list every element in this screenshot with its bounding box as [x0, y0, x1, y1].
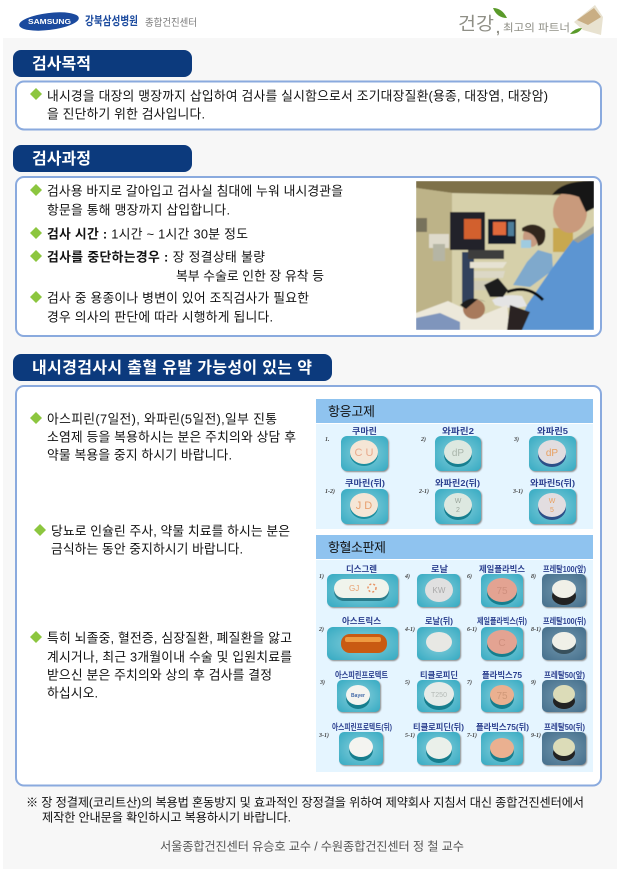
chart: antiplatelet pills — [316, 535, 593, 772]
pill: 와파린2: dP — [452, 448, 464, 459]
icon: bullet — [34, 524, 46, 536]
pill labels: 3) — [319, 679, 325, 686]
heading: 출혈 유발 약 — [13, 354, 332, 381]
footnote: 제작한 안내문을 확인하시고 복용하시기 바랍니다. — [42, 810, 291, 824]
pill labels: 프레탈100(앞) — [543, 564, 586, 574]
panel: procedure — [16, 177, 601, 336]
pill: 와파린5 뒤: W — [549, 498, 556, 505]
text: stop conditions — [47, 250, 324, 284]
pill labels: 티클로피딘(뒤) — [413, 722, 464, 732]
credits: 서울종합건진센터 유승호 교수 / 수원종합건진센터 정 철 교수 — [160, 840, 464, 854]
pill labels: 아스트릭스 — [342, 616, 381, 626]
text: procedure step: 검사용 바지로 갈아입고 검사실 침대에 누워 내시경관을 — [47, 184, 343, 198]
pill labels: 5-1) — [405, 732, 415, 739]
slogan: 최고의 파트너 — [503, 22, 570, 34]
icon: envelope — [570, 5, 603, 35]
pill labels: 제일플라빅스(뒤) — [477, 616, 527, 626]
heading: 검사목적 — [13, 50, 192, 77]
text: diabetes advice: 당뇨로 인슐린 주사, 약물 치료를 하시는 분은 — [51, 524, 290, 538]
text: diabetes advice — [51, 524, 290, 556]
pill labels: 4) — [404, 573, 410, 580]
pill: 와파린2 뒤: W — [455, 498, 462, 505]
pill labels: 프레탈100(뒤) — [543, 616, 586, 626]
pill labels: 와파린5 — [537, 426, 568, 436]
text: stroke advice: 계시거나, 최근 3개월이내 수술 및 입원치료를 — [47, 650, 292, 664]
heading: 검사목적: 검사목적 — [32, 55, 91, 73]
pill: 쿠마린 뒤 — [341, 489, 388, 524]
pill labels: 1) — [319, 573, 324, 580]
text: stop conditions: 복부 수술로 인한 장 유착 등 — [176, 268, 324, 284]
bed and patient — [416, 301, 510, 330]
pill: 쿠마린 — [341, 436, 388, 471]
header: hospital logo — [18, 9, 197, 34]
pill labels: 프레탈50(뒤) — [544, 722, 585, 732]
text: biopsy: 검사 중 용종이나 병변이 있어 조직검사가 필요한 — [47, 290, 309, 306]
panel: purpose — [16, 82, 601, 130]
pill labels: 플라빅스75(뒤) — [476, 722, 529, 732]
text: purpose: 내시경을 대장의 맹장까지 삽입하여 검사를 실시함으로서 조기대장질환(용종, 대장염, 대장암) — [47, 88, 548, 104]
doctor — [520, 232, 594, 330]
pill labels: 9-1) — [531, 732, 541, 739]
text: procedure step — [47, 184, 343, 218]
pill labels: 5) — [405, 679, 410, 686]
header: slogan with envelope — [458, 5, 603, 36]
pill labels: 1. — [325, 437, 330, 443]
pill: 와파린2 뒤: 2 — [456, 507, 460, 514]
pill labels: 3) — [513, 436, 519, 443]
row 4 pills — [339, 732, 586, 765]
cart — [462, 252, 474, 307]
pill labels: 티클로피딘 — [420, 670, 458, 680]
center name: 종합건진센터 — [145, 17, 197, 29]
text: stroke advice: 하십시오. — [47, 686, 98, 700]
hospital name: 강북삼성병원 — [85, 14, 138, 28]
pill labels: 쿠마린(뒤) — [345, 478, 385, 488]
text: stroke advice: 받으신 분은 주치의와 상의 후 검사를 결정 — [47, 668, 272, 682]
pill labels: 쿠마린 — [352, 426, 377, 436]
text: aspirin advice: 아스피린(7일전), 와파린(5일전),일부 진통 — [47, 412, 277, 426]
icon: Samsung logo: SAMSUNG — [28, 17, 71, 26]
pill labels: 6) — [467, 573, 472, 580]
pill labels: 8-1) — [531, 626, 541, 633]
heading: antiplatelet: 항혈소판제 — [328, 540, 386, 555]
heading: 검사과정 — [13, 145, 192, 172]
pill labels: 제일플라빅스 — [479, 564, 525, 574]
pill labels: 2) — [420, 436, 426, 443]
pill: 와파린2 — [435, 436, 481, 471]
icon: bullet — [30, 291, 42, 303]
chart: anticoagulant pills — [316, 399, 593, 529]
pill: 와파린5 뒤 — [529, 489, 576, 524]
pill: 와파린2 뒤 — [435, 489, 481, 524]
pill labels: 아스피린프로텍트 — [335, 670, 388, 680]
icon: bullet — [30, 412, 42, 424]
row 1 pills — [327, 574, 586, 607]
pill labels — [325, 426, 575, 495]
icon: bullet — [30, 184, 42, 196]
heading: 출혈 유발 약: 내시경검사시 출혈 유발 가능성이 있는 약 — [32, 358, 312, 377]
text: aspirin advice: 약물 복용을 중지 하시기 바랍니다. — [47, 448, 232, 462]
text: biopsy: 경우 의사의 판단에 따라 시행하게 됩니다. — [47, 310, 273, 324]
footnote — [26, 794, 584, 824]
text: purpose: 을 진단하기 위한 검사입니다. — [47, 106, 205, 122]
text: stroke advice: 특히 뇌졸중, 혈전증, 심장질환, 폐질환을 앓고 — [47, 630, 292, 646]
row 2 pills: C — [498, 638, 506, 649]
pill labels: 플라빅스75 — [482, 670, 522, 680]
pill labels: 프레탈50(앞) — [544, 670, 585, 680]
pill labels — [318, 564, 586, 739]
cabinet — [553, 228, 573, 252]
pill labels: 7-1) — [467, 732, 477, 739]
row 2 pills — [327, 627, 586, 660]
row 1 pills: GJ — [349, 584, 359, 593]
pill labels: 로날 — [431, 564, 448, 574]
pill labels: 7) — [467, 679, 472, 686]
pill labels: 4-1) — [404, 626, 415, 633]
heading: 검사과정: 검사과정 — [32, 150, 91, 168]
pill labels: 디스그렌 — [346, 564, 377, 574]
text: diabetes advice: 금식하는 동안 중지하시기 바랍니다. — [51, 542, 243, 556]
pill labels: 아스피린프로텍트(뒤) — [332, 722, 392, 732]
text: stroke advice — [47, 630, 292, 700]
heading: anticoagulant: 항응고제 — [328, 404, 375, 419]
pill labels: 와파린2(뒤) — [435, 478, 480, 488]
pill labels: 3-1) — [512, 488, 523, 495]
text: biopsy — [47, 290, 309, 324]
pill: 와파린5: dP — [546, 448, 558, 459]
text: procedure step: 항문을 통해 맹장까지 삽입합니다. — [47, 202, 230, 218]
hand and scope — [492, 295, 527, 308]
slogan: 건강 — [458, 14, 494, 34]
text: duration: 검사 시간 : 1시간 ~ 1시간 30분 정도 — [47, 226, 248, 242]
row 1 pills: KW — [433, 586, 446, 595]
pill labels: 9) — [531, 679, 536, 686]
row 1 pills: 75 — [496, 586, 508, 597]
pill labels: 3-1) — [318, 732, 329, 739]
row 3 pills: Bayer — [351, 693, 365, 699]
icon: Samsung logo — [18, 9, 80, 34]
wall equipment — [416, 218, 427, 232]
row 3 pills — [337, 680, 586, 712]
pill labels: 8) — [531, 573, 536, 580]
text: purpose — [47, 88, 548, 122]
pill: 쿠마린 뒤: J D — [356, 500, 372, 512]
pill labels: 2-1) — [418, 488, 429, 495]
footnote: ※ 장 정결제(코리트산)의 복용법 혼동방지 및 효과적인 장정결을 위하여 제약회사 지침서 대신 종합건진센터에서 — [26, 794, 584, 810]
pill labels: 와파린5(뒤) — [530, 478, 575, 488]
pill labels: 1-2) — [325, 488, 335, 495]
photo: endoscopy room — [416, 181, 594, 330]
pill labels: 6-1) — [467, 626, 477, 633]
monitors — [450, 212, 485, 250]
pill: 쿠마린: C U — [355, 447, 374, 459]
pill labels: 로날(뒤) — [425, 616, 453, 626]
pill labels: 와파린2 — [442, 426, 474, 436]
pill labels: 2) — [318, 626, 324, 633]
row 3 pills: 75 — [496, 691, 508, 702]
text: aspirin advice: 소염제 등을 복용하시는 분은 주치의와 상담 후 — [47, 430, 296, 444]
slogan — [458, 14, 570, 36]
slogan: , — [496, 20, 500, 36]
icon: leaf — [493, 8, 507, 18]
icon: bullet — [30, 88, 42, 100]
text: aspirin advice — [47, 412, 296, 462]
icon: bullet — [30, 250, 42, 262]
text: stop conditions: 검사를 중단하는경우 : 장 정결상태 불량 — [47, 250, 265, 264]
icon: bullet — [30, 631, 42, 643]
panel: drugs — [16, 386, 601, 786]
pill: 와파린5 뒤: 5 — [550, 507, 554, 514]
pill: 와파린5 — [529, 436, 576, 471]
row 3 pills: T250 — [431, 692, 447, 699]
nurse — [513, 250, 553, 287]
icon: bullet — [30, 227, 42, 239]
